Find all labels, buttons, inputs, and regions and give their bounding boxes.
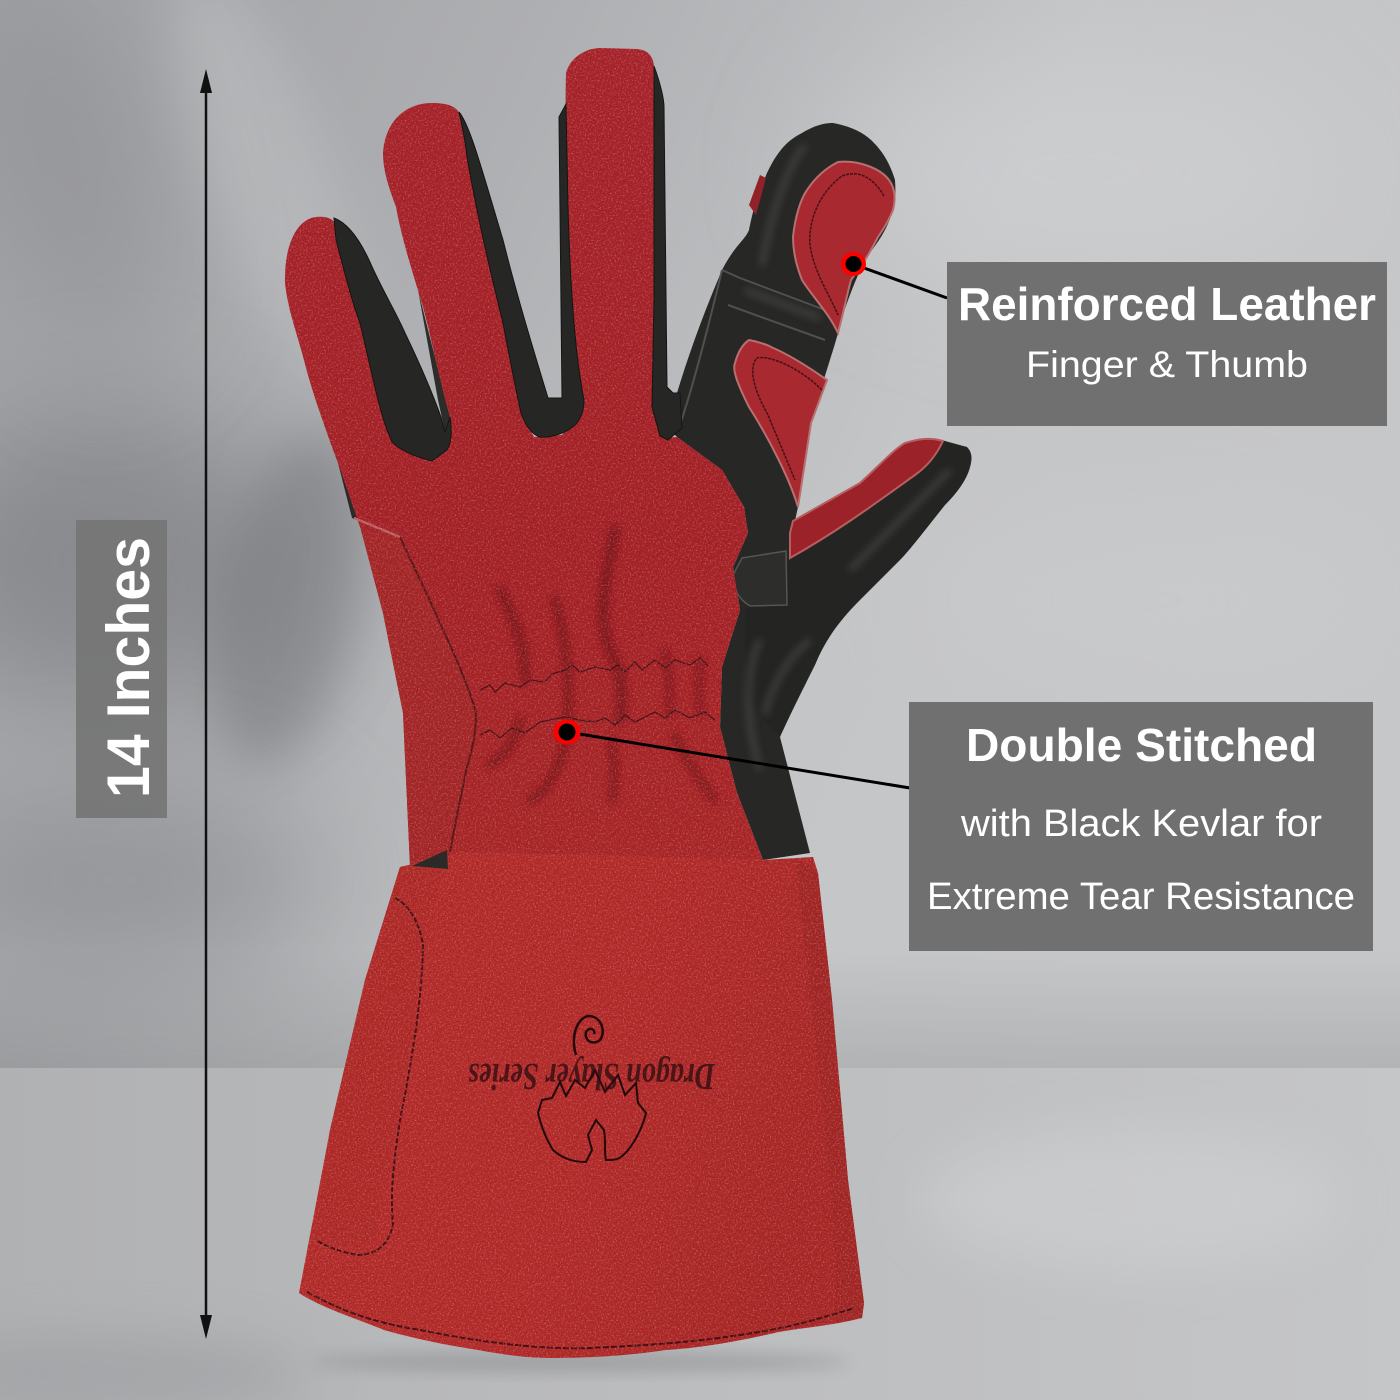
cuff dark notch: [412, 850, 448, 869]
black leather between middle and index: [652, 66, 682, 440]
small red on index side: [749, 175, 766, 215]
callout: Reinforced Leather: Finger & Thumb: [1026, 344, 1308, 385]
label: 14 Inches: [76, 520, 167, 818]
palm stitching: [480, 658, 715, 738]
black leather between ring and middle: [459, 104, 584, 437]
label: 14 Inches: 14 Inches: [95, 537, 162, 798]
callout: Double Stitched: [909, 702, 1373, 951]
red index finger patch: [734, 340, 827, 507]
panel seam: [400, 537, 476, 852]
marker dot: stitching: [554, 720, 580, 744]
palm wrinkles: [490, 530, 715, 800]
suede light grain texture: [285, 48, 864, 1358]
callout leader: double stitched: [567, 732, 910, 788]
callout leader: reinforced leather: [853, 264, 947, 298]
red fingertip reinforcement: [793, 162, 895, 333]
callout: Reinforced Leather: [947, 262, 1387, 426]
background wall: [0, 0, 1400, 1070]
black leather between pinky and ring: [334, 218, 451, 461]
cuff side shading: [796, 859, 864, 1322]
thumb base patch: [733, 551, 787, 606]
black wedge at pinky base: [338, 463, 402, 538]
thumb red inner panel: [790, 439, 943, 558]
callout: Double Stitched: Double Stitched: [966, 719, 1317, 771]
flame emblem: [538, 1070, 646, 1162]
callout: Reinforced Leather: Reinforced Leather: [958, 278, 1376, 330]
dark strip behind pinky gap: [418, 290, 450, 432]
black leather thumb: [745, 439, 972, 737]
background floor: [0, 1068, 1400, 1400]
red suede gauntlet cuff: [299, 852, 864, 1358]
height arrow: 14 inches: [200, 69, 212, 1339]
index knuckle seam: [680, 270, 825, 425]
black leather index finger: [670, 123, 895, 860]
callout: Double Stitched: with Black Kevlar for: [960, 803, 1322, 845]
cuff hem stitching: [307, 1292, 855, 1348]
red suede palm and fingers: [285, 48, 763, 866]
wrist panel shade: [361, 530, 477, 866]
marker dot: fingertip: [841, 252, 866, 276]
callout: Double Stitched: Extreme Tear Resistance: [927, 876, 1355, 918]
cuff patch stitching: [316, 898, 423, 1255]
suede dark grain texture: [285, 48, 864, 1358]
flame swirl: [574, 1016, 603, 1055]
logo: Dragon Slayer Series: [468, 1016, 716, 1162]
leather highlights: [745, 145, 950, 770]
logo text: Dragon Slayer Series: [468, 1055, 716, 1097]
glove illustration: [285, 48, 972, 1358]
